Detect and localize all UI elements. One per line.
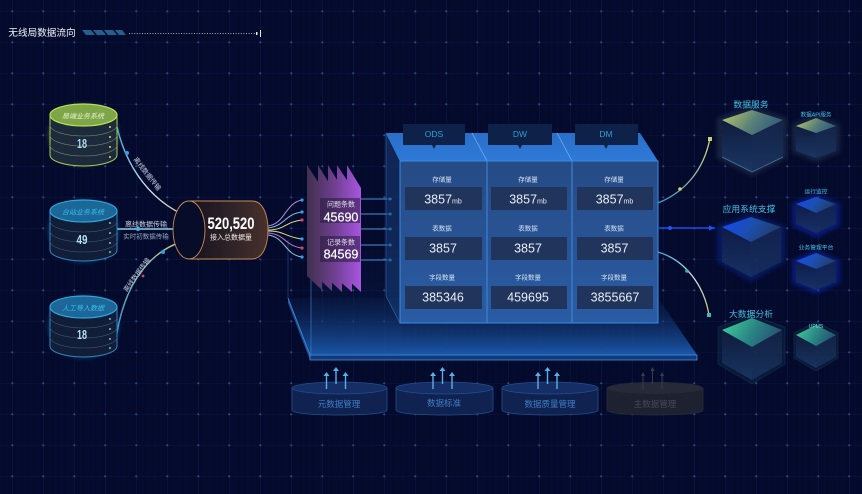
source: blue database 3: 人工导入数据: [62, 304, 105, 312]
column: DW: 3857mb: [509, 192, 547, 206]
source: green database: 局端业务系统: [62, 112, 105, 120]
block roof and side: [386, 133, 658, 323]
governance: quality: 数据质量管理: [524, 399, 576, 409]
column: DW: DW: [513, 129, 527, 139]
purple filter fins: [307, 165, 361, 292]
hub fan lines: [268, 198, 304, 259]
column: DW: 459695: [507, 290, 549, 304]
cube: data services: [717, 98, 787, 176]
flow label: offline middle: 离线数据传输: [125, 220, 167, 228]
metric: record count: 84569: [324, 248, 358, 262]
cube: data API service: [792, 110, 840, 162]
cube: UPMS: UPMS: [809, 324, 824, 330]
metric: record count: [324, 238, 358, 262]
column: DW: [487, 124, 572, 323]
governance: master data, inactive: 主数据管理: [634, 399, 677, 409]
column: ODS: 表数据: [432, 224, 452, 232]
column: ODS: ODS: [425, 129, 444, 139]
governance: standards: [396, 367, 493, 415]
governance: metadata: 元数据管理: [318, 399, 361, 409]
source: blue database 2: [48, 200, 118, 262]
column: DM: DM: [599, 129, 613, 139]
column: DM: [572, 124, 658, 323]
arrows: [535, 367, 560, 389]
column: ODS: 3857mb: [424, 192, 462, 206]
cube: data services: 数据服务: [733, 98, 769, 110]
flow lines: sources to hub: [117, 127, 197, 333]
cube: application support: [717, 203, 785, 282]
cube: big data analysis: 大数据分析: [729, 308, 773, 319]
source: blue database 3: 18: [77, 327, 87, 342]
warehouse block: [386, 124, 658, 323]
cube: business management platform: 业务管理平台: [799, 244, 834, 252]
hub cylinder: 520,520: [208, 215, 254, 233]
flow label: realtime middle: 实时初数据传输: [123, 232, 169, 240]
title stripes: [82, 30, 126, 35]
governance: metadata: [292, 367, 387, 415]
source: green database: [48, 104, 118, 166]
cube: operations monitor: [792, 188, 840, 238]
column: DM: 3855667: [591, 290, 639, 304]
column: ODS: 存储量: [432, 174, 452, 184]
source: blue database 2: 台站业务系统: [62, 208, 105, 216]
metric: question count: [324, 200, 358, 224]
column: DW: 存储量: [518, 174, 538, 184]
column: ODS: 385346: [422, 290, 464, 304]
metric: record count: 记录条数: [327, 238, 355, 246]
hub cylinder: 接入总数据量: [210, 232, 252, 242]
column: ODS: 字段数量: [429, 272, 456, 282]
fin output lines: [361, 198, 392, 262]
column: ODS: 3857: [429, 242, 457, 256]
column: DM: 字段数量: [601, 272, 628, 282]
governance: master data, inactive: [607, 367, 703, 415]
governance: quality: [502, 367, 598, 415]
governance: standards: 数据标准: [427, 398, 461, 408]
column: DM: 存储量: [604, 174, 624, 184]
metric: question count: 问题条数: [327, 200, 355, 208]
column: DM: 表数据: [604, 224, 624, 232]
arrows: [430, 367, 455, 389]
arrows: [641, 367, 664, 389]
source: blue database 3: [48, 296, 118, 358]
column: ODS: [400, 124, 487, 323]
flow label: offline upper: 离线数据传输: [131, 155, 163, 193]
column: DM: 3857: [601, 242, 628, 256]
cube: big data analysis: [718, 308, 785, 384]
title: [8, 27, 261, 39]
source: blue database 2: 49: [76, 232, 88, 247]
metric: question count: 45690: [324, 210, 358, 224]
output connectors: [658, 137, 715, 317]
column: DW: 3857: [514, 242, 542, 256]
column: DW: 表数据: [518, 224, 538, 232]
cube: data API service: 数据API服务: [801, 110, 832, 118]
hub cylinder: [173, 201, 268, 259]
cube: application support: 应用系统支撑: [723, 203, 776, 214]
column: DW: 字段数量: [515, 272, 542, 282]
source: green database: 18: [77, 136, 87, 151]
arrows: [324, 367, 348, 389]
cube: operations monitor: 运行监控: [804, 188, 828, 196]
column: DM: 3857mb: [596, 192, 633, 206]
flow label: offline lower: 离线数据传输: [121, 256, 152, 294]
title: 无线局数据流向: [8, 27, 76, 39]
cube: business management platform: [792, 244, 840, 294]
cube: UPMS: [794, 322, 838, 371]
platform and glass wall: [288, 240, 697, 360]
